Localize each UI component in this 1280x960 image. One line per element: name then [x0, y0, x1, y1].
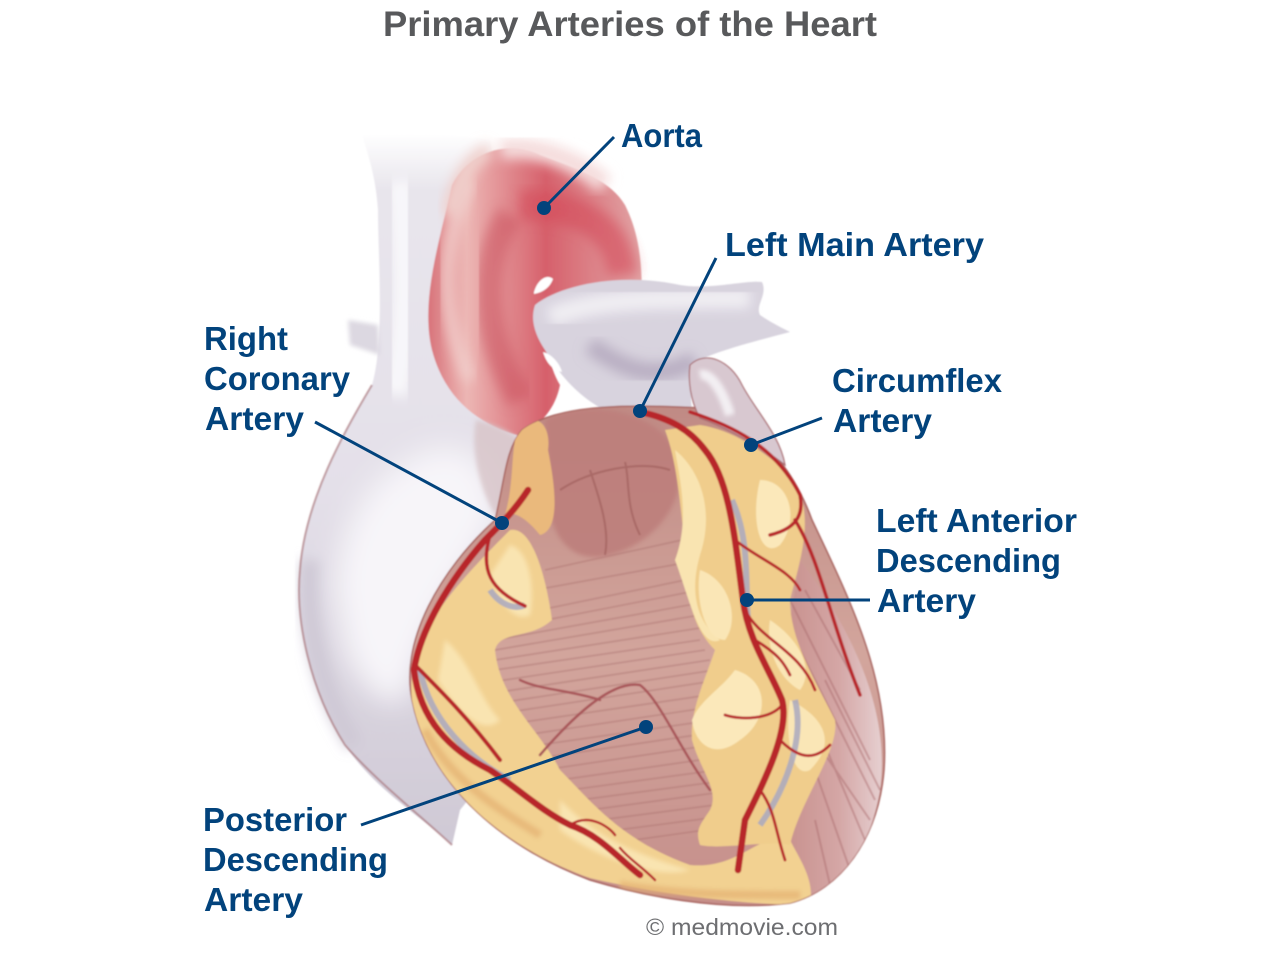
fat: right groove [505, 420, 555, 535]
copyright credit: © medmovie.com [646, 914, 838, 940]
leader line and dot: Aorta [537, 137, 614, 215]
left ventricle muscle [792, 590, 883, 896]
leader line and dot: Left Anterior Descending Artery [740, 593, 870, 607]
posterior descending (faint, through muscle) [520, 680, 710, 790]
translucent atrium over aortic root [474, 420, 530, 515]
fat: anterior groove [665, 425, 835, 846]
left main, LAD and branches [640, 412, 784, 870]
heart illustration [299, 133, 885, 906]
label: Posterior Descending Artery: Posterior [203, 801, 347, 838]
title: Primary Arteries of the Heart [383, 5, 877, 44]
label: Circumflex Artery: Artery [833, 402, 933, 439]
right coronary artery [414, 490, 640, 875]
pulmonary artery [533, 277, 790, 418]
label: Circumflex Artery: Circumflex [832, 362, 1003, 399]
left atrial appendage [689, 358, 785, 465]
label: Right Coronary Artery: Coronary [204, 360, 351, 397]
blue-grey veins [420, 500, 798, 825]
label: Left Main Artery: Left Main Artery [725, 226, 985, 263]
leader line and dot: Left Main Artery [633, 258, 716, 418]
label: Left Anterior Descending Artery: Descending [876, 542, 1061, 579]
aorta [428, 148, 642, 515]
coronary arteries [414, 412, 860, 880]
gaps beside aortic arch [534, 277, 553, 294]
label: Posterior Descending Artery: Artery [204, 881, 304, 918]
label: Left Anterior Descending Artery: Artery [877, 582, 977, 619]
pulmonary root [545, 409, 680, 557]
label: Aorta: Aorta [621, 117, 703, 154]
label: Posterior Descending Artery: Descending [203, 841, 388, 878]
label: Right Coronary Artery: Right [204, 320, 288, 357]
heart body [410, 358, 885, 906]
central muscle fibres [496, 540, 712, 840]
circumflex [690, 412, 860, 695]
superior vena cava and right atrium [299, 133, 540, 845]
leader line and dot: Posterior Descending Artery [361, 720, 653, 825]
leader line and dot: Circumflex Artery [744, 418, 822, 452]
label: Left Anterior Descending Artery: Left Anterior [876, 502, 1077, 539]
label: Right Coronary Artery: Artery [205, 400, 305, 437]
leader line and dot: Right Coronary Artery [315, 422, 509, 530]
